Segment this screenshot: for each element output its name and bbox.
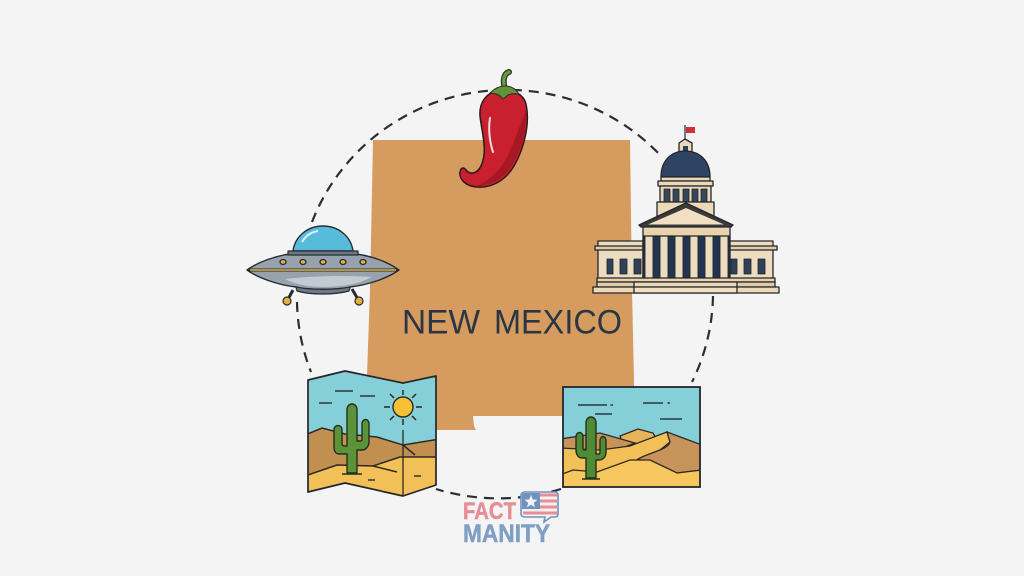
icon: folded desert map bbox=[307, 370, 437, 497]
logo wordmark top: FACT bbox=[463, 498, 516, 525]
dashed circle connecting icons bbox=[297, 90, 713, 498]
icon: state capitol building bbox=[593, 125, 779, 293]
icon: desert landscape picture bbox=[560, 387, 702, 490]
logo: Fact Manity bbox=[463, 492, 558, 548]
logo wordmark bottom: MANITY bbox=[463, 520, 550, 548]
picture cactus bbox=[576, 417, 606, 479]
state label: NEW bbox=[402, 304, 480, 342]
state shape: New Mexico bbox=[367, 140, 634, 430]
icon: chili pepper bbox=[460, 72, 527, 187]
state label: MEXICO bbox=[494, 304, 622, 342]
logo flag speech bubble bbox=[521, 492, 558, 522]
map cactus bbox=[334, 404, 369, 474]
icon: flying saucer bbox=[247, 226, 399, 305]
sun bbox=[384, 390, 422, 425]
